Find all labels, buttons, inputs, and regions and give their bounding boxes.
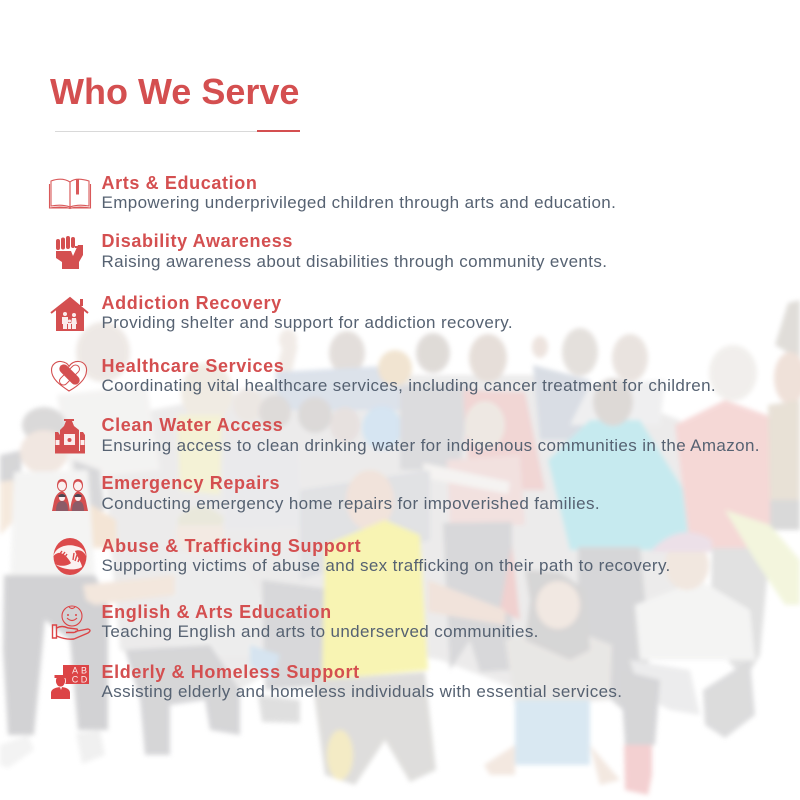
description: Conducting emergency home repairs for impoverished families.: [102, 494, 600, 513]
icon: teacher with ABCD board: B: [81, 666, 87, 676]
heading: Elderly & Homeless Support: [102, 662, 360, 682]
icon: heart with bandage: [50, 360, 88, 392]
item: Arts & Education: [48, 173, 616, 212]
item: Disability Awareness: [56, 231, 607, 271]
icon: raised fist: [56, 236, 83, 269]
heading: Addiction Recovery: [102, 293, 282, 313]
icon: hand holding baby face: [52, 606, 91, 640]
description: Assisting elderly and homeless individuals with essential services.: [102, 682, 622, 701]
item: English & Arts Education: [52, 602, 539, 641]
description: Coordinating vital healthcare services, including cancer treatment for children.: [102, 376, 716, 395]
heading: Healthcare Services: [102, 356, 284, 376]
heading: Arts & Education: [102, 173, 257, 193]
heading: English & Arts Education: [102, 602, 332, 622]
item: Emergency Repairs: [52, 473, 600, 513]
item: Elderly & Homeless Support: [51, 662, 622, 701]
icon: house with family: [50, 296, 89, 331]
item: Clean Water Access: [55, 415, 760, 455]
icon: water bottles: [55, 419, 85, 454]
item: Healthcare Services: [50, 356, 716, 395]
icon: teacher with ABCD board: D: [81, 674, 88, 684]
heading: Clean Water Access: [102, 415, 283, 435]
description: Ensuring access to clean drinking water for indigenous communities in the Amazon.: [102, 436, 760, 455]
icon: two people: [52, 479, 88, 511]
icon: circle with helping hands: [54, 538, 86, 575]
heading: Emergency Repairs: [102, 473, 280, 493]
title: Who We Serve: [50, 71, 299, 112]
icon: teacher with ABCD board: [51, 665, 89, 699]
title underline: [55, 130, 300, 132]
item: Abuse & Trafficking Support: [54, 536, 671, 575]
description: Raising awareness about disabilities through community events.: [102, 252, 607, 271]
icon: teacher with ABCD board: C: [72, 674, 79, 684]
heading: Abuse & Trafficking Support: [102, 536, 361, 556]
heading: Disability Awareness: [102, 231, 293, 251]
item: Addiction Recovery: [50, 293, 513, 332]
icon: teacher with ABCD board: A: [72, 666, 78, 676]
description: Empowering underprivileged children through arts and education.: [102, 193, 616, 212]
description: Teaching English and arts to underserved communities.: [102, 622, 539, 641]
description: Supporting victims of abuse and sex trafficking on their path to recovery.: [102, 556, 671, 575]
icon: open book: [48, 178, 92, 209]
description: Providing shelter and support for addiction recovery.: [102, 313, 513, 332]
